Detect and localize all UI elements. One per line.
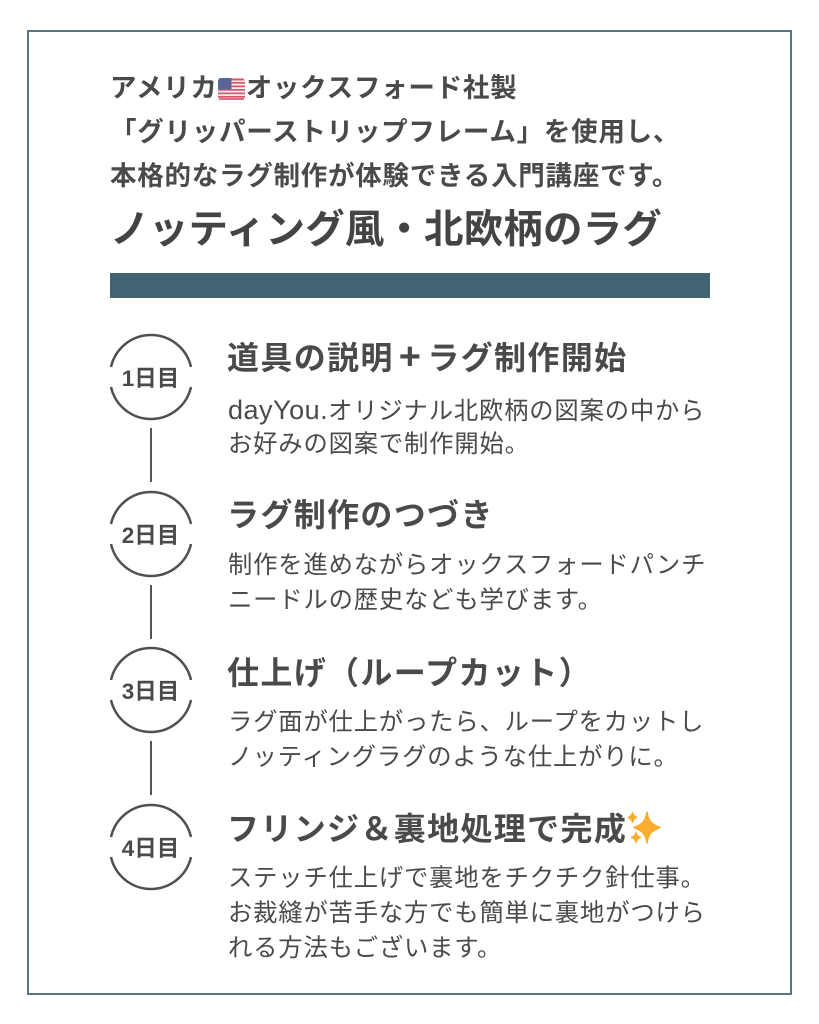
title bar [110, 273, 710, 298]
connector 3 [150, 741, 152, 795]
day 4 body: ステッチ仕上げで裏地をチクチク針仕事。 [228, 865, 706, 892]
day 4 body [228, 865, 706, 962]
day 4 badge [110, 804, 192, 890]
main title: ノッティング風・北欧柄のラグ [110, 208, 662, 252]
day 2 body: ニードルの歴史なども学びます。 [228, 587, 603, 614]
intro line 3: 本格的なラグ制作が体験できる入門講座です。 [110, 161, 679, 191]
day 1 body [228, 395, 705, 458]
day 3 body: ラグ面が仕上がったら、ループをカットし [228, 709, 704, 736]
day 1 badge [110, 334, 192, 420]
day 1 body: お好みの図案で制作開始。 [228, 431, 530, 458]
day 3 heading: 仕上げ（ループカット） [227, 655, 592, 691]
day 3 body: ノッティングラグのような仕上がりに。 [228, 744, 679, 771]
day 3 badge [110, 646, 192, 734]
day 4 badge: 4日目 [122, 836, 179, 860]
day 2 badge: 2日目 [122, 522, 179, 548]
day 1 badge: 1日目 [122, 366, 179, 391]
day 2 heading: ラグ制作のつづき [227, 497, 494, 533]
day 2 badge [110, 490, 192, 578]
day 4 body: お裁縫が苦手な方でも簡単に裏地がつけら [228, 900, 706, 927]
icon: sparkles [627, 811, 661, 844]
connector 1 [150, 428, 152, 482]
day 4 heading: フリンジ＆裏地処理で完成 [227, 811, 627, 847]
connector 2 [150, 585, 152, 639]
day 2 body: 制作を進めながらオックスフォードパンチ [228, 552, 706, 579]
day 3 badge: 3日目 [122, 679, 179, 704]
intro line 2: 「グリッパーストリップフレーム」を使用し、 [110, 117, 680, 147]
day 4 body: れる方法もございます。 [228, 935, 502, 962]
day 2 body [228, 552, 706, 614]
intro text [110, 73, 680, 191]
day 1 body: dayYou.オリジナル北欧柄の図案の中から [228, 395, 705, 425]
day 1 heading: 道具の説明+ラグ制作開始 [227, 336, 627, 378]
day 3 body [228, 709, 704, 771]
intro line 1 with flag: アメリカ オックスフォード社製 [110, 73, 517, 103]
